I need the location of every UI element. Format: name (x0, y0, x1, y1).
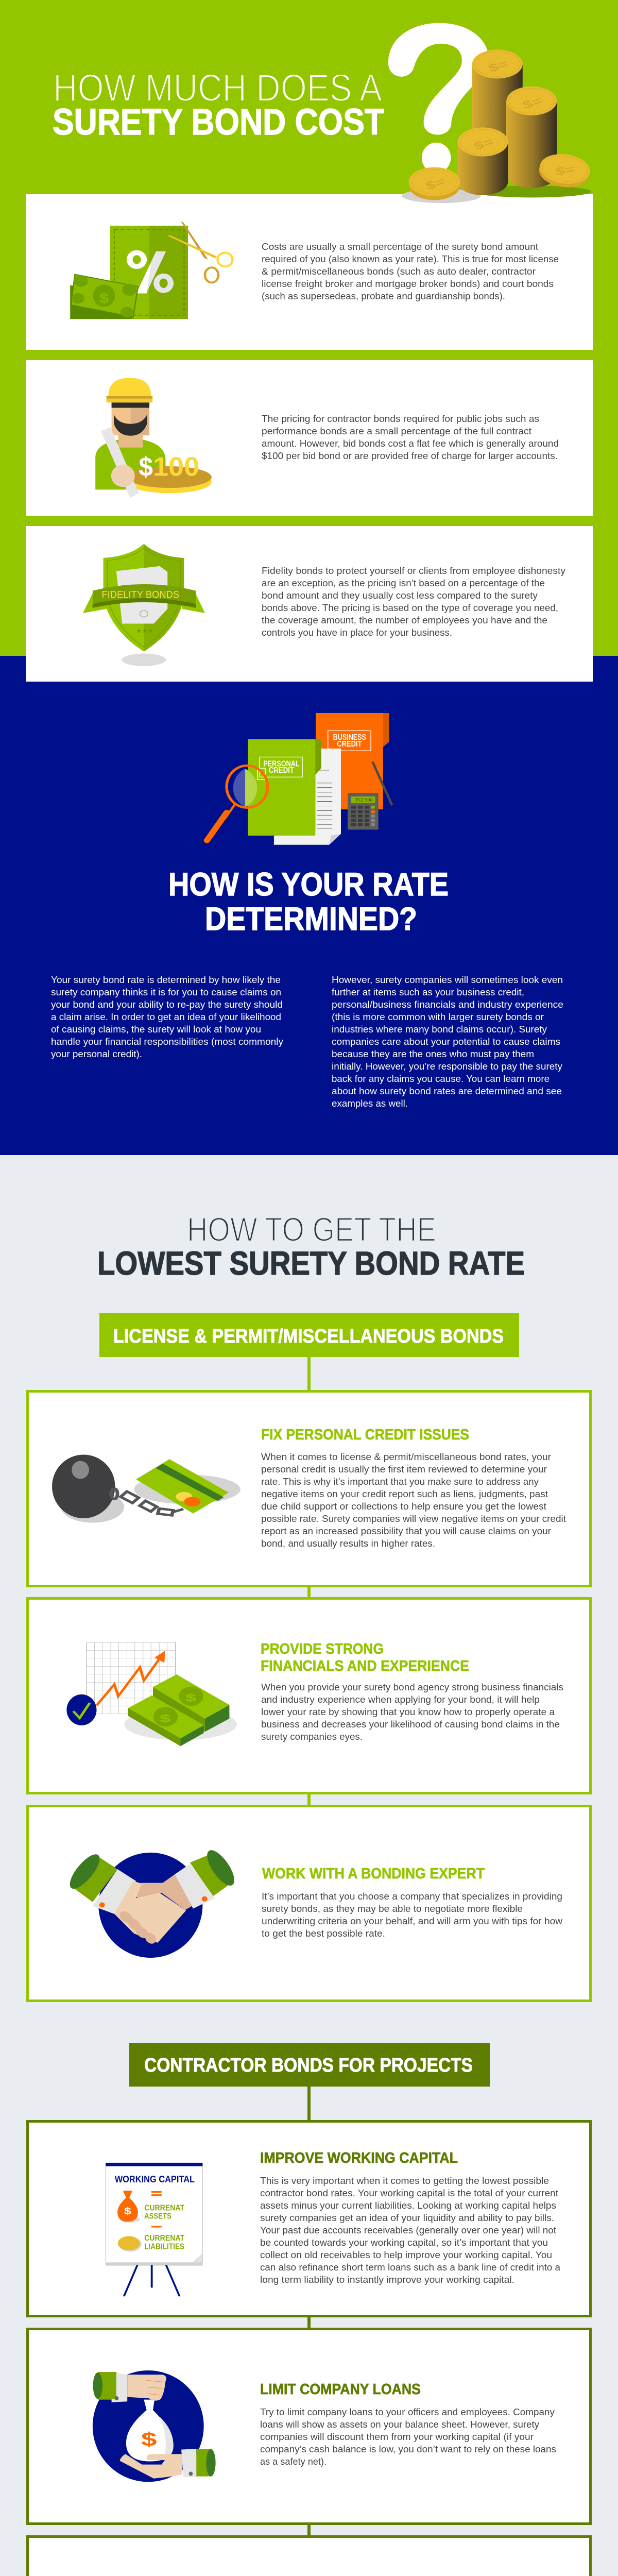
text: provide strong financials: surety companies eyes. (261, 1732, 363, 1742)
heading: fix personal credit issues: FIX PERSONAL CREDIT ISSUES (261, 1427, 469, 1443)
text: improve working capital: surety companies get an idea of your liquidity and ability to pay bills. (260, 2213, 554, 2223)
text: work with a bonding expert: underwriting criteria on your behalf, and will arm you with tips for how (262, 1916, 563, 1926)
text: improve working capital: This is very important when it comes to getting the lowest possible (260, 2176, 549, 2186)
icon: hands passing money bag (93, 2370, 216, 2482)
icon: fidelity bonds shield (83, 544, 205, 666)
illustration: question mark and coins: $= (521, 94, 545, 112)
panel: contractor pricing (26, 360, 593, 516)
text: rate right column: personal/business financials and industry experience (332, 999, 563, 1010)
text: rate right column: companies care about your potential to cause claims (332, 1037, 560, 1047)
text: rate left column (51, 975, 283, 1059)
banner: license and permit bonds (99, 1313, 519, 1357)
heading: how to get the lowest surety bond rate: HOW TO GET THE (187, 1210, 436, 1248)
text: rate left column: your bond and your ability to re-pay the surety should (51, 999, 283, 1010)
text: fidelity pricing: the coverage amount, the number of employees you have and the (262, 615, 547, 625)
text: fix personal credit issues (261, 1452, 566, 1549)
text: limit company loans: companies will discount them from your working capital (if your (260, 2432, 534, 2442)
icon: working capital board: WORKING CAPITAL (115, 2174, 195, 2184)
illustration: credit folders, magnifier and calculator: PERSONAL (263, 759, 300, 768)
text: fix personal credit issues: negative items on your credit report such as liens, judgments, past (261, 1489, 548, 1499)
text: rate right column: about how surety bond rates are determined and see (332, 1086, 562, 1096)
text: fidelity pricing: bond amount and they usually cost less compared to the surety (262, 590, 538, 601)
text: fix personal credit issues: possible rate. Surety companies will view negative items on your credit (261, 1514, 566, 1524)
heading: how is your rate determined (168, 867, 449, 937)
icon: working capital board: $ (124, 2206, 131, 2217)
text: limit company loans: loans will show as assets on your balance sheet. However, surety (260, 2419, 539, 2430)
panel: fidelity pricing (26, 526, 593, 682)
text: percentage cost: required of you (also known as your rate). This is true for most license (262, 254, 559, 264)
title (53, 66, 384, 143)
icon: ball and chain on credit card (52, 1454, 241, 1523)
text: provide strong financials: and industry experience when applying for your bond, it will help (261, 1694, 540, 1705)
title: HOW MUCH DOES A (53, 66, 383, 109)
text: fidelity pricing: Fidelity bonds to protect yourself or clients from employee dishonesty (262, 566, 565, 576)
heading: work with a bonding expert: WORK WITH A BONDING EXPERT (262, 1866, 485, 1882)
panel: work with a bonding expert (28, 1806, 590, 2001)
text: rate right column: further at items such as your business credit, (332, 987, 524, 997)
text: rate left column: surety company thinks it is for you to cause claims on (51, 987, 281, 997)
text: fix personal credit issues: rate. This is why it’s important that you make sure to address any (261, 1477, 539, 1487)
heading: provide strong financials: FINANCIALS AND EXPERIENCE (261, 1658, 469, 1674)
illustration: question mark and coins (388, 23, 593, 203)
text: percentage cost: Costs are usually a small percentage of the surety bond amount (262, 242, 538, 252)
illustration: question mark and coins: $= (487, 57, 510, 75)
icon: cash and percent with scissors (70, 221, 233, 319)
icon: working capital board: ASSETS (144, 2212, 171, 2221)
text: percentage cost: (such as supersedeas, probate and guardianship bonds). (262, 291, 505, 301)
text: improve working capital: collect on old receivables to help improve your working capital. You (260, 2250, 552, 2260)
illustration: credit folders, magnifier and calculator (207, 713, 392, 845)
illustration: credit folders, magnifier and calculator: CREDIT (337, 739, 362, 749)
text: fidelity pricing: controls you have in place for your business. (262, 628, 452, 638)
illustration: question mark and coins: $= (472, 135, 496, 153)
text: contractor pricing: amount. However, bid bonds cost a flat fee which is generally around (262, 438, 559, 449)
panel: fix personal credit issues (28, 1391, 590, 1586)
text: rate right column: (this is more common with larger surety bonds or (332, 1012, 544, 1022)
text: contractor pricing: The pricing for contractor bonds required for public jobs such as (262, 414, 539, 424)
icon: handshake (64, 1848, 240, 1958)
text: fix personal credit issues: bond, and usually results in higher rates. (261, 1538, 435, 1549)
text: rate right column: because they are the ones who must pay them (332, 1049, 534, 1059)
text: percentage cost (262, 242, 559, 301)
text: rate left column: Your surety bond rate is determined by how likely the (51, 975, 281, 985)
text: provide strong financials: business and decreases your likelihood of causing bond claims in the (261, 1719, 560, 1730)
text: rate right column: examples as well. (332, 1098, 408, 1109)
text: fidelity pricing (262, 566, 565, 638)
text: provide strong financials: When you provide your surety bond agency strong business financials (261, 1682, 563, 1692)
icon: construction worker with $100 (95, 378, 212, 498)
text: contractor pricing (262, 414, 559, 461)
illustration: question mark and coins: $= (554, 163, 576, 178)
text: improve working capital: be counted towards your working capital, so it’s important that you (260, 2238, 548, 2248)
banner: contractor bonds for projects: CONTRACTOR BONDS FOR PROJECTS (144, 2055, 473, 2076)
text: limit company loans: company’s cash balance is low, you don’t want to rely on these loans (260, 2444, 556, 2454)
text: improve working capital: long term liability to instantly improve your working capital. (260, 2275, 514, 2285)
icon: working capital board: CURRENAT (144, 2204, 184, 2212)
text: rate right column (332, 975, 563, 1109)
text: work with a bonding expert: surety bonds, as they may be able to negotiate more flexible (262, 1904, 523, 1914)
heading: provide strong financials: PROVIDE STRONG (261, 1641, 384, 1657)
icon: cash and percent with scissors: $ (99, 291, 109, 306)
text: rate left column: a claim arise. In order to get an idea of your likelihood (51, 1012, 281, 1022)
text: rate left column: of causing claims, the surety will look at how you (51, 1024, 261, 1035)
heading: improve working capital: IMPROVE WORKING CAPITAL (260, 2150, 458, 2166)
text: limit company loans: as a safety net). (260, 2456, 327, 2467)
icon: fidelity bonds shield: FIDELITY BONDS (101, 589, 179, 600)
icon: growth chart and cash stacks (66, 1642, 237, 1746)
text: fidelity pricing: are an exception, as the pricing isn’t based on a percentage of the (262, 578, 545, 588)
title: SURETY BOND COST (53, 102, 384, 143)
heading: how to get the lowest surety bond rate (97, 1210, 525, 1282)
icon: construction worker with $100: $ (139, 452, 153, 482)
text: fix personal credit issues: When it comes to license & permit/miscellaneous bond rates, your (261, 1452, 551, 1462)
icon: construction worker with $100: 100 (153, 452, 199, 482)
text: rate left column: your personal credit). (51, 1049, 142, 1059)
icon: working capital board: LIABILITIES (144, 2242, 184, 2251)
text: fix personal credit issues: personal credit is usually the first item reviewed to determine your (261, 1464, 547, 1475)
text: rate right column: However, surety companies will sometimes look even (332, 975, 563, 985)
text: work with a bonding expert: It’s important that you choose a company that specializes in providing (262, 1891, 562, 1902)
text: contractor pricing: $100 per bid bond or are provided free of charge for larger accounts. (262, 451, 558, 461)
text: limit company loans (260, 2407, 556, 2467)
panel: percentage cost (26, 194, 593, 350)
heading: limit company loans: LIMIT COMPANY LOANS (260, 2381, 421, 2398)
heading: how to get the lowest surety bond rate: LOWEST SURETY BOND RATE (97, 1245, 525, 1282)
text: rate right column: back for any claims you cause. You can learn more (332, 1074, 550, 1084)
icon: working capital board (106, 2163, 202, 2296)
text: percentage cost: & permit/miscellaneous bonds (such as auto dealer, contractor (262, 266, 536, 277)
illustration: question mark and coins: $= (423, 175, 448, 193)
illustration: credit folders, magnifier and calculator: 352.500 (355, 798, 373, 802)
text: rate left column: handle your financial responsibilities (most commonly (51, 1037, 283, 1047)
illustration: credit folders, magnifier and calculator: CREDIT (269, 766, 294, 775)
text: improve working capital (260, 2176, 561, 2285)
heading: how is your rate determined: DETERMINED? (205, 901, 417, 937)
icon: hands passing money bag: $ (141, 2429, 157, 2450)
icon: fidelity bonds shield: ★★★ (136, 628, 153, 634)
text: rate right column: industries where many bond claims occur). Surety (332, 1024, 547, 1035)
panel: improve working capital (28, 2122, 590, 2316)
panel: leave equity in your company (28, 2537, 590, 2576)
banner: license and permit bonds: LICENSE & PERMIT/MISCELLANEOUS BONDS (113, 1326, 504, 1347)
text: improve working capital: contractor bond rates. Your working capital is the total of your current (260, 2188, 558, 2198)
heading: provide strong financials (261, 1641, 469, 1674)
text: work with a bonding expert: to get the best possible rate. (262, 1928, 385, 1939)
text: fix personal credit issues: due child support or collections to help ensure you get the lowest (261, 1501, 546, 1512)
text: rate right column: initially. However, you’re responsible to pay the surety (332, 1061, 562, 1072)
text: provide strong financials (261, 1682, 563, 1742)
text: provide strong financials: lower your rate by showing that you know how to properly operate a (261, 1707, 555, 1717)
text: fix personal credit issues: report as an increased possibility that you will cause claims on your (261, 1526, 551, 1536)
icon: growth chart and cash stacks: $ (160, 1713, 171, 1724)
banner: contractor bonds for projects (129, 2043, 490, 2087)
text: improve working capital: Your past due accounts receivables (generally over one year) will not (260, 2225, 556, 2235)
text: work with a bonding expert (262, 1891, 563, 1939)
illustration: credit folders, magnifier and calculator: BUSINESS (333, 733, 366, 742)
panel: limit company loans (28, 2329, 590, 2523)
text: percentage cost: license freight broker and mortgage broker bonds) and court bonds (262, 279, 554, 289)
heading: how is your rate determined: HOW IS YOUR RATE (168, 867, 449, 903)
panel: provide strong financials (28, 1598, 590, 1793)
text: improve working capital: can also refinance short term loans such as a bank line of credit into a (260, 2262, 561, 2273)
text: improve working capital: assets minus your current liabilities. Looking at working capital helps (260, 2200, 556, 2211)
text: fidelity pricing: bonds above. The pricing is based on the type of coverage you need, (262, 603, 558, 613)
text: contractor pricing: performance bonds are a small percentage of the full contract (262, 426, 531, 436)
icon: working capital board: CURRENAT (144, 2234, 184, 2243)
icon: growth chart and cash stacks: $ (185, 1692, 197, 1704)
text: limit company loans: Try to limit company loans to your officers and employees. Company (260, 2407, 555, 2417)
